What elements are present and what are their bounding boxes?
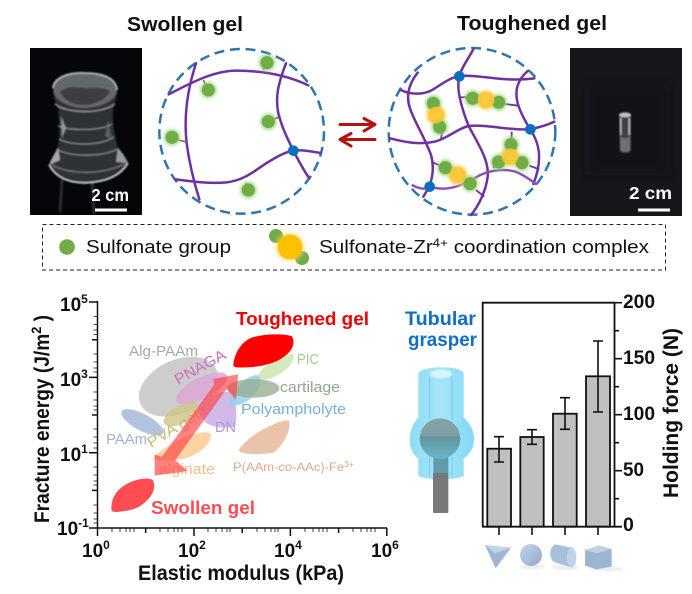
region: PIC xyxy=(258,353,294,380)
label: Alg-PAAm: Alg-PAAm xyxy=(129,343,198,360)
photo: swollen gel: 2 cm xyxy=(92,185,129,205)
icon: sphere xyxy=(520,544,545,569)
label: PNAGA: PNAGA xyxy=(172,346,229,388)
data regions xyxy=(118,345,294,461)
axis tick labels: 10 xyxy=(178,541,199,562)
y axis title: ) xyxy=(31,315,54,327)
icon: cube xyxy=(585,546,623,571)
axis tick labels: 0 xyxy=(103,538,110,552)
axis tick labels: 10 xyxy=(371,541,392,562)
legend: coordination complex xyxy=(269,229,650,265)
label: PAAm: PAAm xyxy=(106,431,147,448)
axis tick labels: 10 xyxy=(60,370,81,391)
region: DN xyxy=(198,392,236,428)
illustration: tubular grasper xyxy=(410,367,474,513)
legend: sulfonate group: Sulfonate group xyxy=(86,236,231,257)
tick labels: 150 xyxy=(623,347,655,369)
region: Alg-PAAm xyxy=(129,345,227,428)
axes xyxy=(89,301,387,536)
heading: Tubular grasper xyxy=(405,308,477,351)
heading: Tubular grasper: grasper xyxy=(408,329,477,351)
region: Polyampholyte xyxy=(229,375,260,406)
axis tick labels: 10 xyxy=(274,541,295,562)
axis tick labels: 10 xyxy=(60,295,81,316)
legend box xyxy=(42,224,666,270)
double arrow xyxy=(155,374,238,476)
frame and ticks xyxy=(482,302,622,535)
legend: coordination complex: coordination complex xyxy=(448,236,650,257)
label: Swollen gel: Swollen gel xyxy=(151,497,255,518)
label: Toughened gel: Toughened gel xyxy=(236,308,369,329)
error bars xyxy=(494,341,603,462)
y axis title: 2 xyxy=(28,326,44,334)
axis tick labels: 5 xyxy=(81,292,88,306)
region: cartilage xyxy=(227,379,279,398)
heading: Toughened gel: Toughened gel xyxy=(457,12,607,35)
bars xyxy=(487,376,610,527)
icon: pyramid xyxy=(485,545,511,568)
label: DN: DN xyxy=(215,419,236,436)
diagram: toughened gel network xyxy=(389,48,555,215)
tick labels: 200 xyxy=(623,291,655,313)
region: toughened gel xyxy=(233,334,293,368)
axis tick labels: 2 xyxy=(199,538,206,552)
label: PIC: PIC xyxy=(297,351,319,368)
region: PAAm xyxy=(118,404,167,441)
axis tick labels: 4 xyxy=(295,538,302,552)
axis tick labels xyxy=(57,292,399,562)
axis tick labels: 6 xyxy=(392,538,399,552)
icons: object shapes xyxy=(485,544,623,571)
photo: toughened gel xyxy=(570,48,682,216)
label: cartilage: cartilage xyxy=(280,379,340,396)
region: swollen gel xyxy=(111,479,154,512)
axis tick labels: 1 xyxy=(81,442,88,456)
icon: cylinder xyxy=(550,544,579,570)
heading: Tubular grasper: Tubular xyxy=(405,308,476,330)
legend: coordination complex: 4+ xyxy=(433,236,448,250)
label: Polyampholyte: Polyampholyte xyxy=(241,401,346,418)
heading: Swollen gel: Swollen gel xyxy=(127,13,243,36)
axis tick labels: 10 xyxy=(82,541,103,562)
label: PVA gel: PVA gel xyxy=(144,407,203,451)
region: P(AAm-co-AAc)-Fe3+ xyxy=(239,420,289,454)
axis tick labels: 10 xyxy=(57,519,78,540)
region: PVA gel xyxy=(160,397,203,431)
label: P(AAm-co-AAc)-Fe3+: 3+ xyxy=(344,460,354,469)
photo: toughened gel: 2 cm xyxy=(629,183,672,203)
diagram: swollen gel network xyxy=(159,49,324,214)
chart: holding force bars xyxy=(482,291,683,536)
legend: coordination complex: Sulfonate-Zr xyxy=(319,236,421,257)
axis tick labels: 3 xyxy=(81,367,88,381)
label: alginate: alginate xyxy=(159,461,215,478)
region: PNAGA xyxy=(172,366,232,411)
arrows: reversible xyxy=(340,118,375,146)
region: alginate xyxy=(153,432,211,461)
tick labels: 50 xyxy=(623,459,644,481)
tick labels: 0 xyxy=(623,514,634,536)
tick labels xyxy=(623,291,655,536)
label: P(AAm-co-AAc)-Fe3+: P(AAm- co-AAc)-Fe xyxy=(233,460,340,474)
chart: fracture energy vs elastic modulus xyxy=(28,292,399,585)
y axis title: Holding force (N) xyxy=(660,328,683,498)
photo: swollen gel xyxy=(30,48,142,215)
tick labels: 100 xyxy=(623,403,655,425)
x axis title: Elastic modulus (kPa) xyxy=(138,562,344,585)
y axis title: Fracture energy (J/m xyxy=(31,315,54,523)
axis tick labels: -1 xyxy=(78,516,89,530)
axis tick labels: 10 xyxy=(60,445,81,466)
